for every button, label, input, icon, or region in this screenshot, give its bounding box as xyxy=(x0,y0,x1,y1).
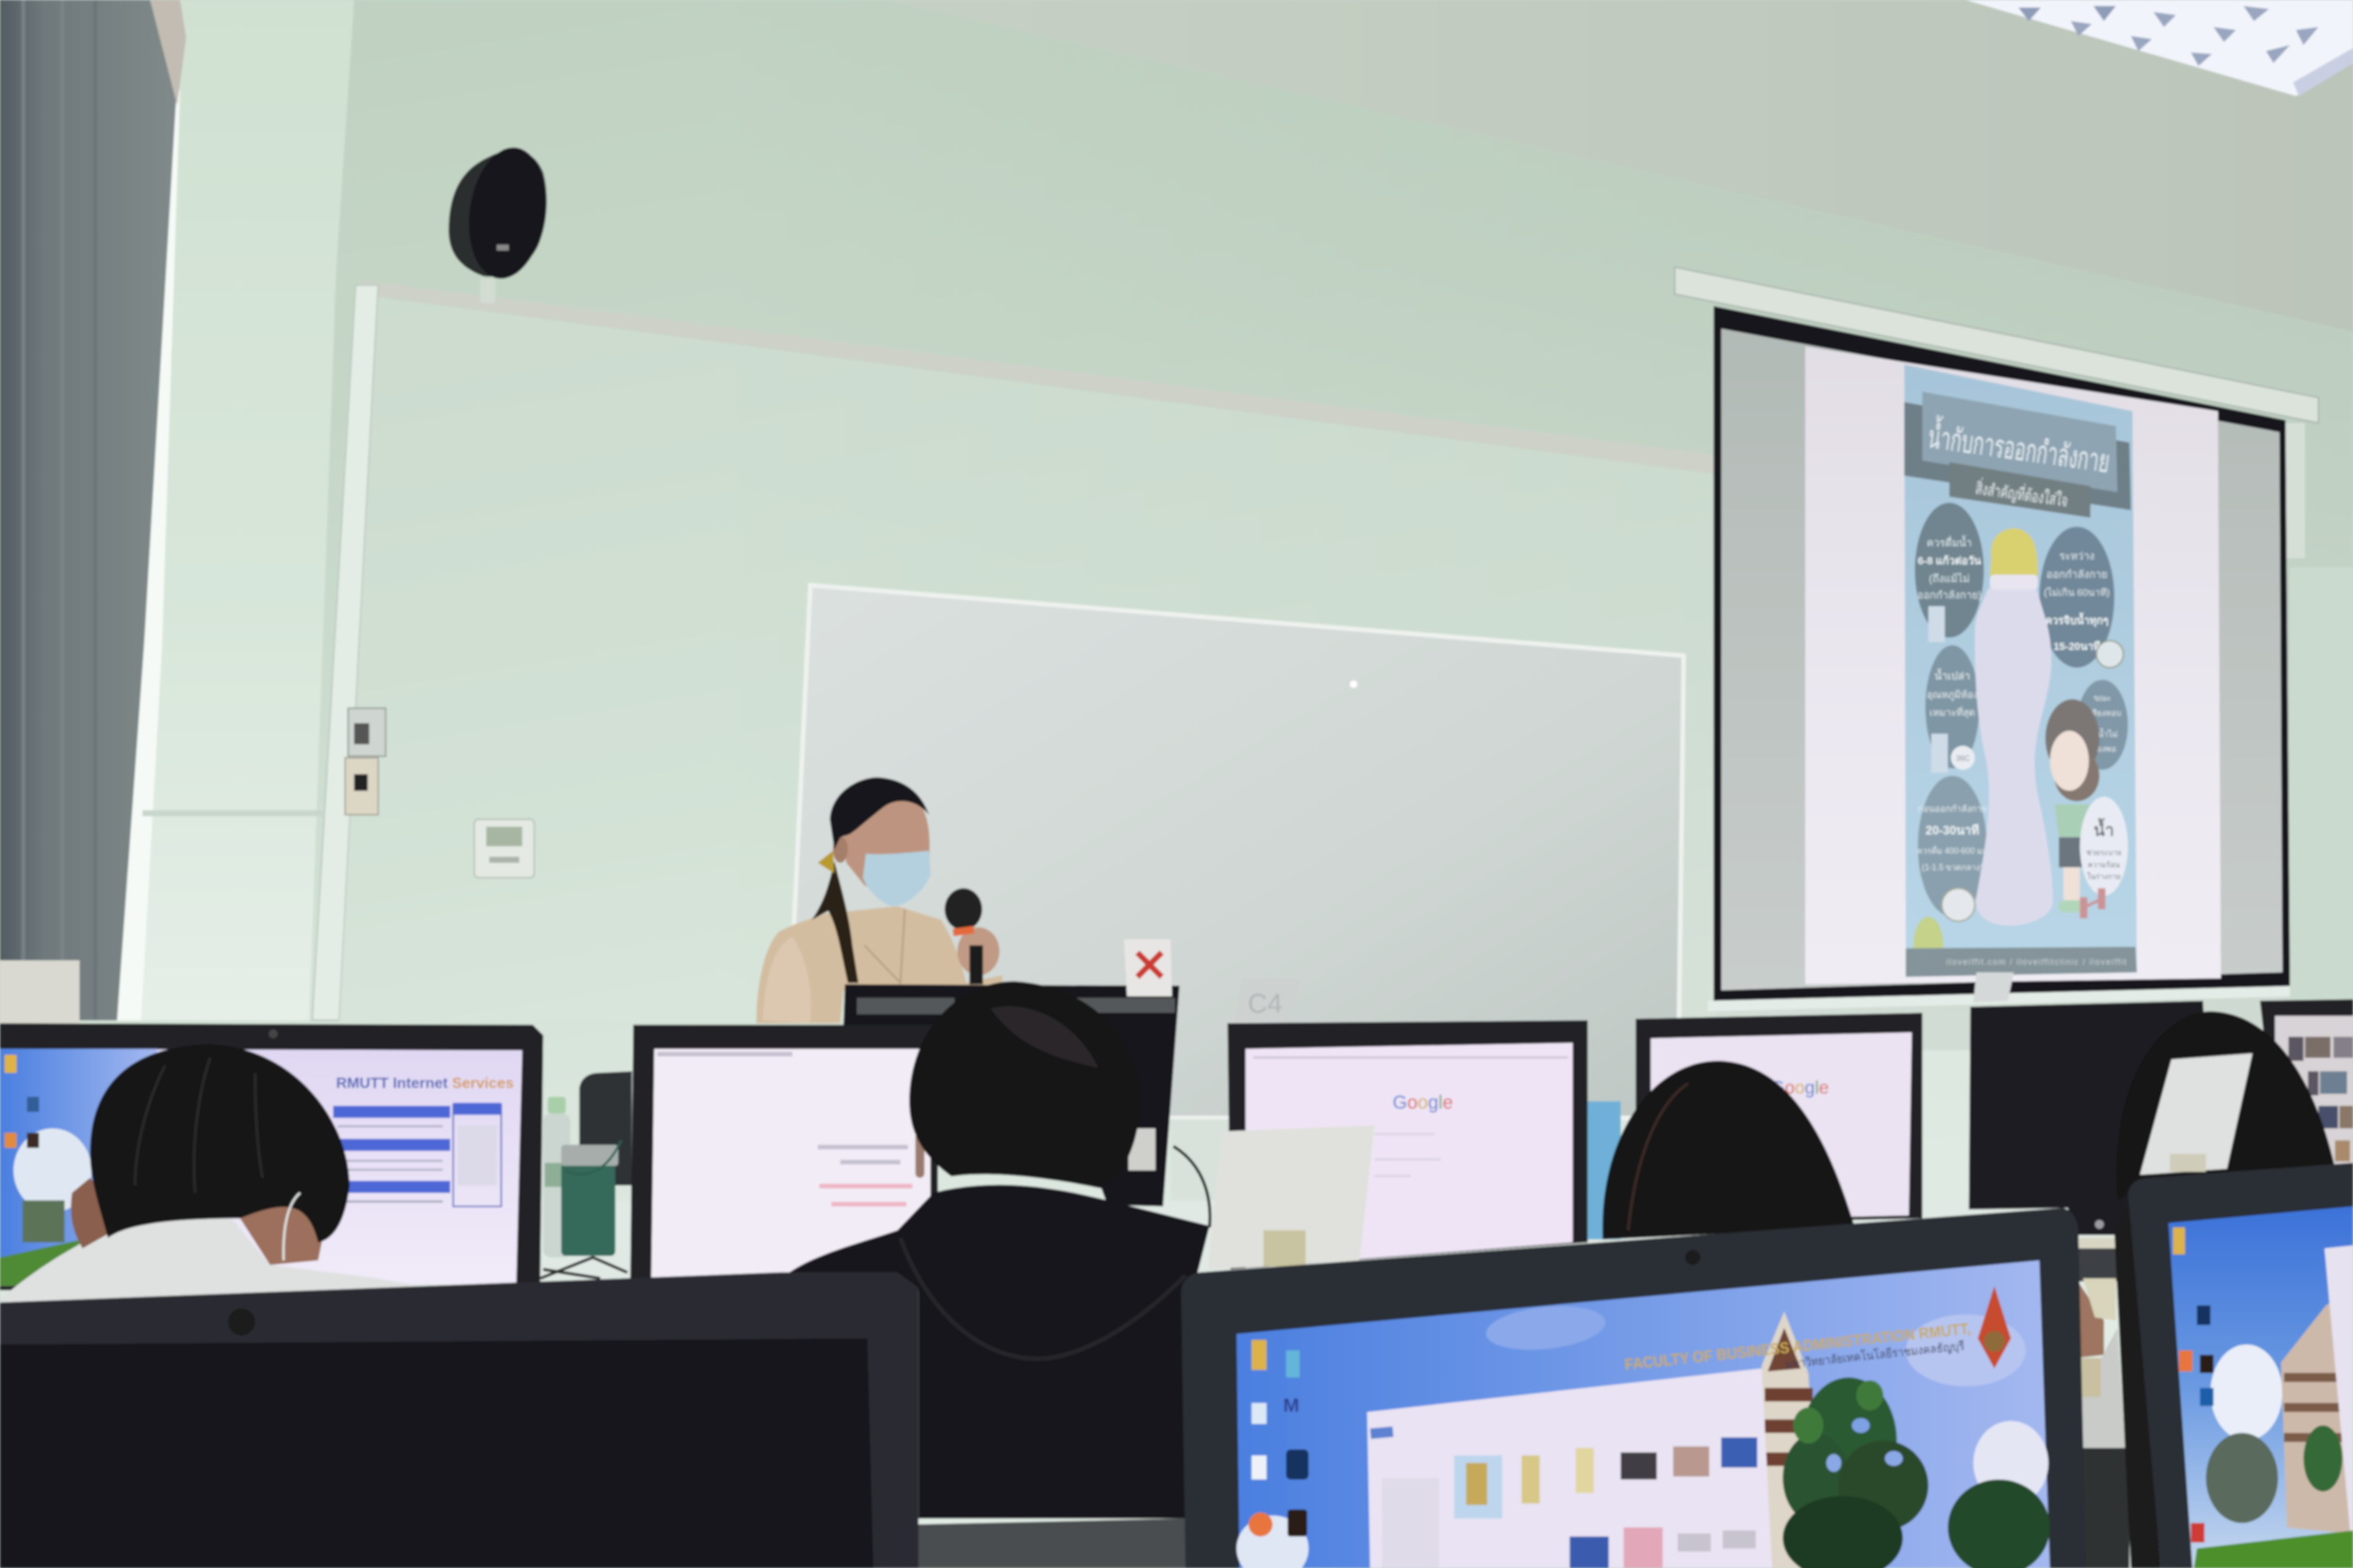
right laptop lawn xyxy=(2194,1530,2353,1568)
slide bubble 2: (ไม่เกิน 60นาที) xyxy=(2044,586,2110,599)
university emblem xyxy=(1977,1286,2010,1368)
Google logo: Google xyxy=(1393,1093,1453,1113)
projector screen xyxy=(1674,267,2318,1002)
slide bubble 5: (1-1.5 ขวดกลาง) xyxy=(1922,863,1983,872)
slide bubble 4: ดื่มน้ำไม่ xyxy=(2087,728,2118,739)
student 1 hair strands xyxy=(135,1058,263,1192)
slide bubble 2 xyxy=(2040,527,2123,667)
wall below whiteboard xyxy=(1171,1119,1230,1209)
wall switches xyxy=(345,708,386,815)
ceiling xyxy=(886,0,2353,331)
microphone xyxy=(945,888,983,984)
paper sheet on monitor xyxy=(1208,1126,1374,1270)
student 1 shirt xyxy=(0,1212,424,1308)
monitor 2 xyxy=(631,1025,937,1278)
monitor 1 web page: RMUTT Internet Services xyxy=(336,1076,514,1092)
presenter xyxy=(757,777,1002,1023)
slide footer xyxy=(1906,947,2137,977)
presenter hair bow xyxy=(818,851,834,873)
wallpaper tree xyxy=(1783,1378,2050,1568)
foreground laptop right xyxy=(2114,1163,2353,1568)
monitor 1 xyxy=(0,1023,543,1290)
tent card with red X xyxy=(1124,939,1172,997)
monitor cable xyxy=(1174,1146,1210,1227)
slide white water bubble: ในร่างกาย xyxy=(2087,872,2121,881)
desk surface xyxy=(540,1200,2071,1290)
curtain xyxy=(0,0,177,1020)
tent card seat number xyxy=(1234,978,1301,1025)
screen surface xyxy=(1721,328,2282,990)
slide cartoon girl xyxy=(2045,699,2100,912)
slide bubble 1 xyxy=(1914,503,1984,642)
student 2 hair xyxy=(909,982,1141,1189)
monitor 4 Google xyxy=(1227,1020,1588,1270)
foreground laptop center xyxy=(1181,1208,2086,1568)
student 1 xyxy=(0,1045,424,1308)
panel wall below rail xyxy=(339,297,1715,1020)
slide white page xyxy=(1805,346,2221,984)
slide logo xyxy=(1913,917,1944,974)
monitor 1 desktop icons xyxy=(5,1055,39,1148)
tent card seat number: C4 xyxy=(1248,989,1282,1019)
right wall shading xyxy=(0,0,2353,1050)
slide background xyxy=(1904,364,2137,977)
cables xyxy=(540,1257,627,1278)
slide white water bubble xyxy=(2080,797,2128,896)
wallpaper clouds xyxy=(1483,1301,1608,1355)
slide bubble 5 xyxy=(1917,776,1988,921)
presenter ponytail xyxy=(812,861,858,983)
student 2 ear xyxy=(916,1133,924,1177)
right laptop icons xyxy=(2173,1227,2185,1255)
paper sheet at student 4 xyxy=(2140,1053,2252,1175)
slide bubble 3: น้ำเปล่า xyxy=(1934,668,1970,682)
slide bubble 3: 36C xyxy=(1956,754,1970,762)
monitor 5: Google xyxy=(1770,1079,1829,1098)
screen base strip xyxy=(1707,985,2296,1012)
slide subtitle ribbon xyxy=(1949,462,2090,518)
monitor 1 desktop xyxy=(0,1048,522,1286)
slide title ribbon back xyxy=(1904,402,2131,510)
presenter blouse xyxy=(757,906,1002,1023)
presenter monitor back xyxy=(843,984,1179,1207)
slide water bottle xyxy=(1975,528,2053,926)
student 1 hair xyxy=(90,1045,349,1242)
presenter sleeve highlight xyxy=(762,936,811,1023)
slide footer: iloveiffit.com / iloveiffitclinic / iloveiffit xyxy=(1946,957,2127,967)
tent card under screen xyxy=(1974,972,2014,1002)
speaker xyxy=(449,142,553,303)
slide bubble 3 xyxy=(1926,646,1979,773)
presenter collar xyxy=(864,909,904,983)
monitor 4 screen xyxy=(1245,1043,1573,1268)
slide title ribbon xyxy=(1922,392,2118,492)
slide white water bubble: ความร้อน xyxy=(2088,860,2121,869)
student 2 hood fold xyxy=(901,1238,1186,1359)
paper tape xyxy=(2169,1154,2206,1172)
horizontal wall trim xyxy=(142,810,323,816)
window light strip xyxy=(117,90,180,1020)
desktop icons: M xyxy=(1283,1395,1299,1416)
right laptop trees xyxy=(2206,1433,2278,1523)
laptop bezel xyxy=(1181,1208,2086,1568)
screen frame xyxy=(1714,306,2290,1002)
student 1 ear and neck xyxy=(71,1177,128,1248)
student 3 xyxy=(1603,1061,1855,1240)
clear water bottle xyxy=(543,1096,570,1257)
slide bubble 3: เหมาะที่สุด xyxy=(1929,705,1976,718)
screen roller xyxy=(1674,267,2318,424)
slide title ribbon: น้ำกับการออกกำลังกาย xyxy=(1926,413,2113,480)
presenter ear xyxy=(833,836,848,863)
slide bubble 5: 20-30นาที xyxy=(1926,823,1979,837)
slide bubble 3: อุณหภูมิห้อง xyxy=(1927,689,1978,700)
wallpaper gold title: FACULTY OF BUSINESS ADMINISTRATION RMUTT, xyxy=(1624,1320,1972,1374)
slide dumbbell xyxy=(2080,888,2105,919)
student 4 xyxy=(2117,1012,2335,1200)
student 1 earphone xyxy=(283,1192,300,1260)
slide bubble 2: ระหว่าง xyxy=(2059,552,2094,563)
paper top-left xyxy=(0,960,80,1023)
student 2 hair highlight xyxy=(990,1006,1098,1068)
tent card with red X: ✕ xyxy=(1130,942,1168,992)
blue lanyard xyxy=(1588,1101,1621,1240)
hp logo xyxy=(2095,1220,2104,1229)
whiteboard xyxy=(792,585,1684,1118)
curtain valance xyxy=(150,0,186,105)
monitor 6 back xyxy=(1969,1000,2206,1235)
wallpaper Thai subtitle: มหาวิทยาลัยเทคโนโลยีราชมงคลธัญบุรี xyxy=(1785,1338,1965,1372)
right laptop wallpaper xyxy=(2169,1207,2353,1568)
slide bubble 4: มีเสียงหอบ xyxy=(2084,708,2121,717)
right wall bracket xyxy=(2284,424,2305,558)
monitor 7 photo screen xyxy=(2260,1000,2353,1185)
keyboard and arm between monitors xyxy=(2073,1238,2129,1568)
side wall right xyxy=(2290,568,2353,1017)
wall rail xyxy=(354,280,1715,474)
slide bubble 4: ขณะ xyxy=(2093,694,2111,703)
slide bubble 4: เพียงพอ xyxy=(2089,744,2116,754)
presenter face xyxy=(843,799,930,901)
vertical wall trim xyxy=(312,285,378,1020)
foreground monitor back left xyxy=(0,1272,919,1568)
slide bubble 2: 15-20นาที xyxy=(2054,640,2101,652)
monitor 5 xyxy=(1636,1013,1922,1224)
office chair xyxy=(579,1071,632,1185)
presenter hand xyxy=(957,927,1000,975)
slide bubble 4 xyxy=(2077,680,2128,770)
file explorer window xyxy=(1367,1368,1772,1568)
slide bubble 1: ออกกำลังกาย) xyxy=(1917,590,1982,601)
left column xyxy=(117,0,354,1020)
ceiling light fixture xyxy=(1966,0,2353,96)
monitor 1 web page xyxy=(333,1076,514,1207)
thermostat xyxy=(474,819,535,878)
student 3 hair strands xyxy=(1628,1083,1689,1230)
laptop wallpaper sky xyxy=(1237,1260,2050,1568)
bottom chair xyxy=(916,1518,1186,1568)
slide bubble 5: ก่อนออกกำลังกาย xyxy=(1917,804,1987,814)
slide bubble 5: ควรดื่ม 400-600 มล xyxy=(1917,845,1988,856)
slide subtitle ribbon: สิ่งสำคัญที่ต้องใส่ใจ xyxy=(1975,477,2070,510)
slide bubble 2: ออกกำลังกาย xyxy=(2046,569,2107,581)
monitor 2 web page xyxy=(651,1048,931,1278)
green tumbler xyxy=(561,1141,621,1256)
slide bubble 1: 6-8 แก้วต่อวัน xyxy=(1917,554,1981,567)
slide white water bubble: ช่วยระบาย xyxy=(2087,849,2121,857)
wallpaper building xyxy=(1762,1311,1822,1568)
laptop webcam xyxy=(1685,1250,1700,1265)
slide bubble 2: ควรจิบน้ำทุกๆ xyxy=(2045,612,2108,628)
slide white water bubble: น้ำ xyxy=(2093,818,2114,840)
student 2 hoodie xyxy=(790,1185,1209,1518)
presenter face mask xyxy=(863,851,931,906)
slide bubble 1: ควรดื่มน้ำ xyxy=(1927,535,1972,549)
right laptop open window xyxy=(2325,1245,2353,1530)
whiteboard glare xyxy=(1350,680,1357,688)
desktop icons xyxy=(1249,1340,1308,1537)
infographic slide xyxy=(1904,364,2137,977)
presenter hair xyxy=(830,777,929,849)
right laptop building xyxy=(2281,1290,2350,1533)
student 2 in hoodie xyxy=(790,982,1209,1518)
slide bubble 1: (ถึงแม้ไม่ xyxy=(1929,573,1970,585)
